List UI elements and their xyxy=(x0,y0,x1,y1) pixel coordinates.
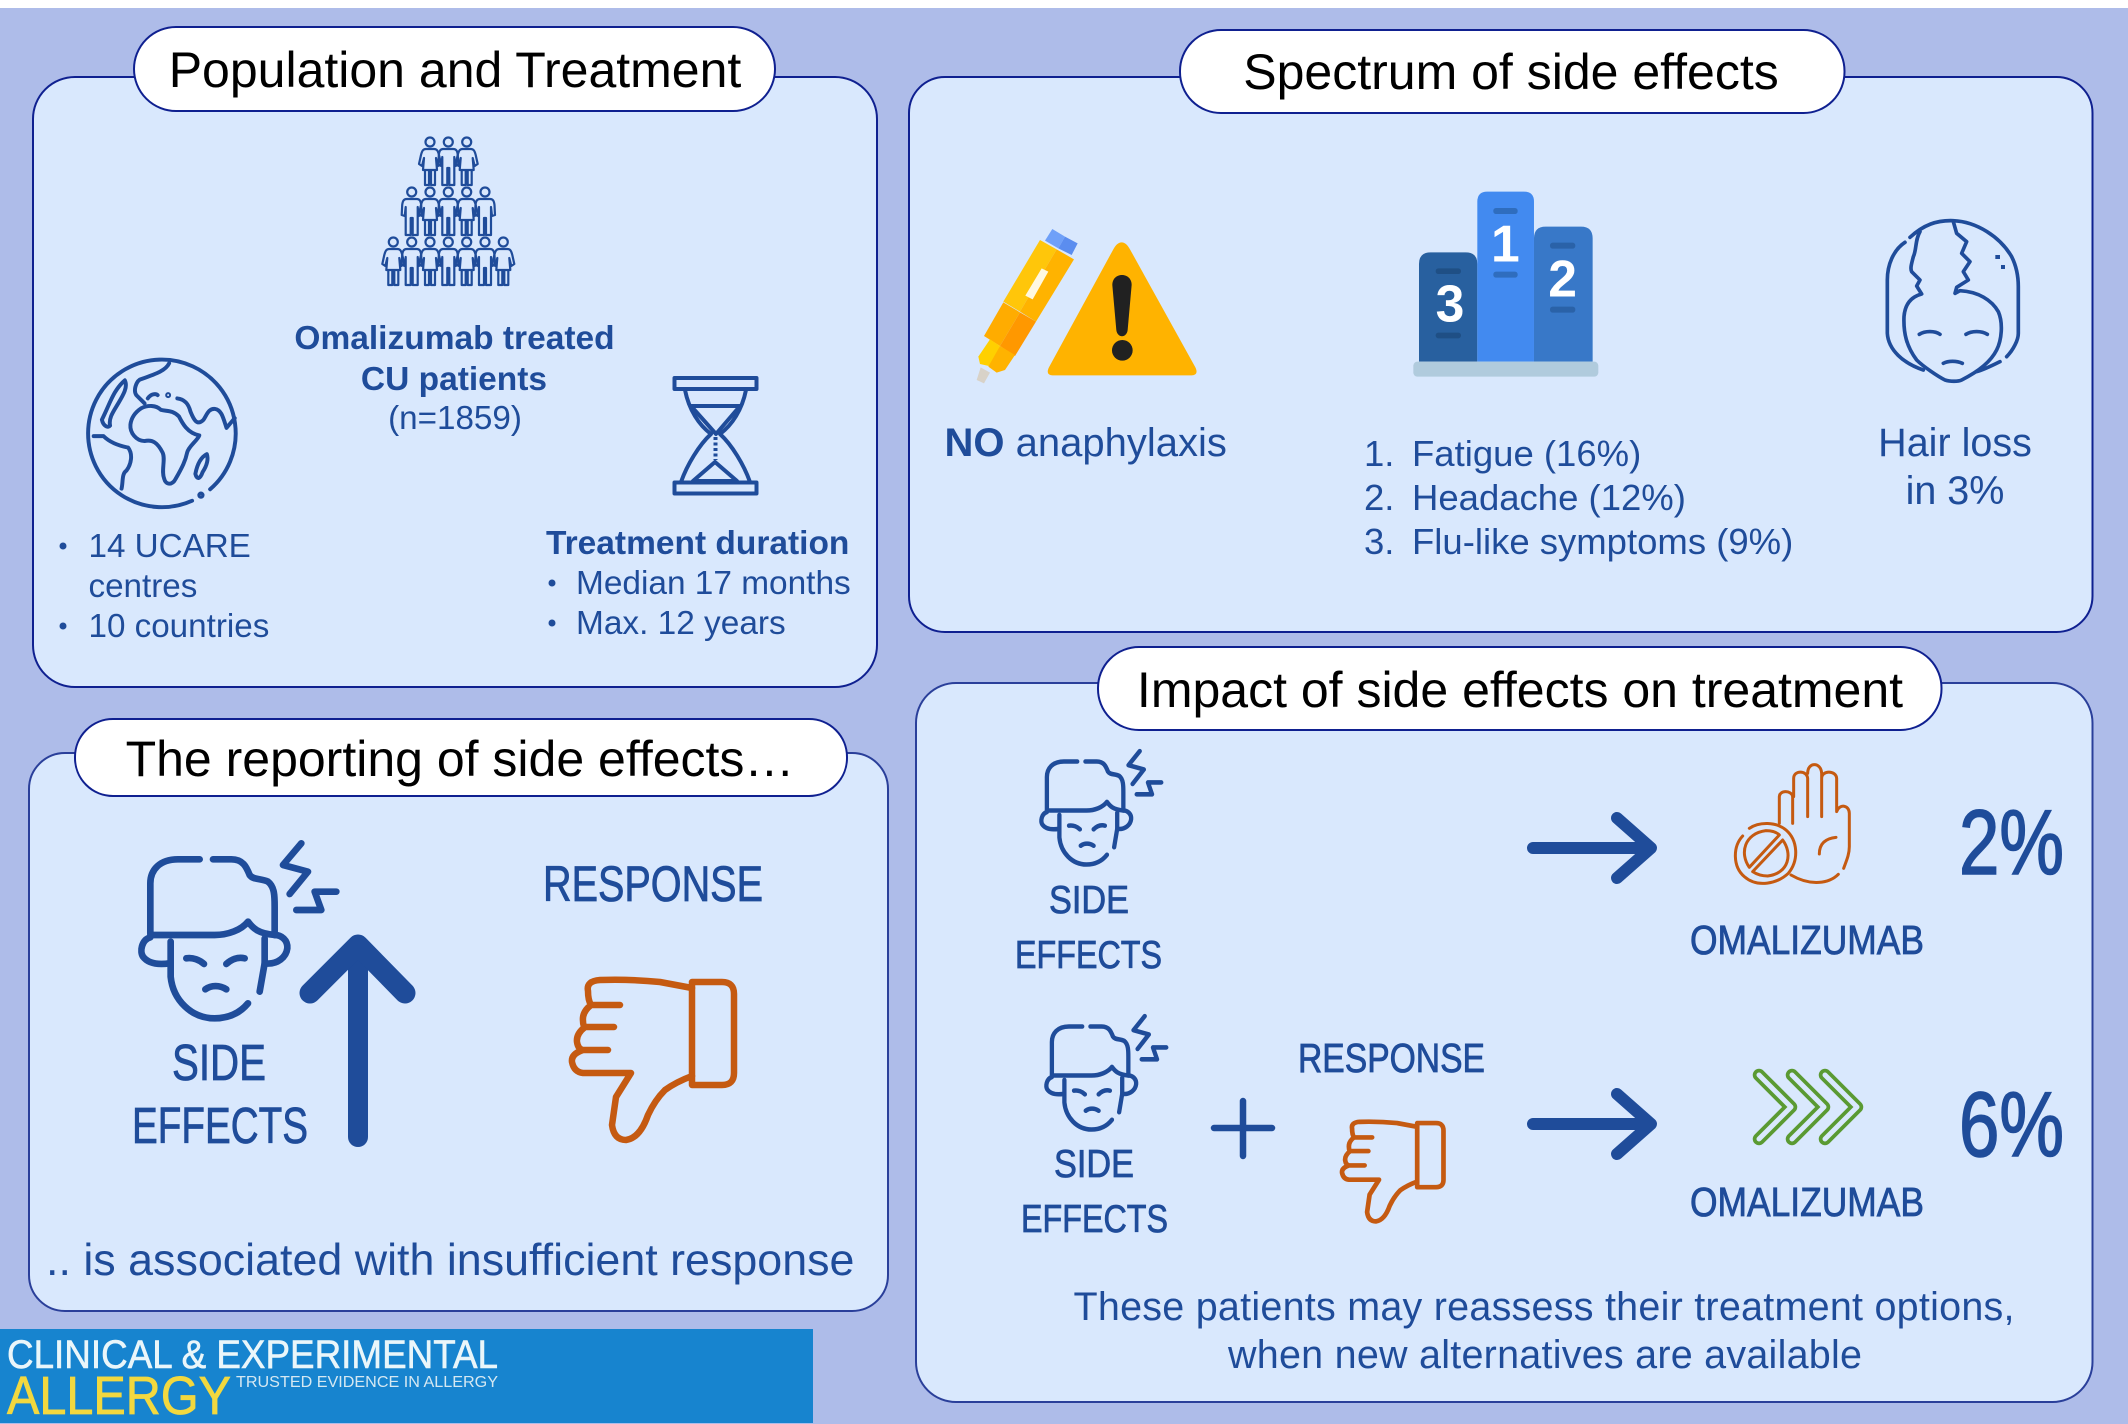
panel: Spectrum of side effects xyxy=(909,30,2092,632)
text: hair loss xyxy=(1878,421,2032,513)
text: conclusion: These patients may reassess their treatment options, xyxy=(1074,1285,2014,1329)
text: ranked side effects: 2. xyxy=(1364,477,1394,518)
text: centres and countries: 14 UCARE xyxy=(88,528,251,565)
text: side effects, row 2 xyxy=(1021,1143,1168,1241)
stat: 2%: 2% xyxy=(1959,792,2064,894)
text: hair loss: in 3% xyxy=(1906,469,2004,513)
icon: hourglass xyxy=(674,378,756,494)
icon: head with side effects, row 1 xyxy=(1041,751,1161,865)
icon: globe xyxy=(88,360,236,507)
panel: Population and Treatment xyxy=(33,27,877,687)
text: ranked side effects: 3. xyxy=(1364,521,1394,562)
text: side effects, row 1 xyxy=(1015,879,1162,977)
icon: plus xyxy=(1214,1101,1272,1156)
text: ranked side effects: 1. xyxy=(1364,433,1394,474)
icon: podium: 3 xyxy=(1436,275,1464,333)
text: omalizumab, row 2: OMALIZUMAB xyxy=(1690,1179,1924,1225)
text: side effects, row 2: SIDE xyxy=(1054,1143,1134,1186)
heading: Spectrum of side effects: Spectrum of side effects xyxy=(1243,44,1779,100)
text: side effects, row 2: EFFECTS xyxy=(1021,1198,1168,1241)
text: centres and countries xyxy=(60,528,269,645)
text: side effects, row 1: SIDE xyxy=(1049,879,1129,922)
text: treatment duration xyxy=(546,525,851,642)
text: treatment duration: Median 17 months xyxy=(576,565,851,602)
icon: head with side effects xyxy=(141,843,336,1018)
text: conclusion: when new alternatives are available xyxy=(1227,1333,1862,1377)
icon: injection pen and warning triangle xyxy=(977,229,1197,383)
text: side effects, row 1: EFFECTS xyxy=(1015,934,1162,977)
icon: podium: 1 xyxy=(1491,215,1520,273)
text: no anaphylaxis: NO anaphylaxis xyxy=(944,421,1227,465)
text: ranked side effects xyxy=(1364,433,1793,562)
arrow: row 1 xyxy=(1533,818,1651,878)
icon: thumb down xyxy=(572,980,734,1140)
text: centres and countries: centres xyxy=(88,568,197,605)
text: conclusion: .. is associated with insufficient response xyxy=(46,1235,854,1285)
heading: Spectrum of side effects xyxy=(1180,30,1844,113)
icon: hair loss xyxy=(1887,221,2018,381)
text: patient population: Omalizumab treated xyxy=(294,320,615,357)
text: ranked side effects: Fatigue (16%) xyxy=(1412,433,1641,474)
stat: 6%: 6% xyxy=(1959,1074,2064,1176)
logo: Clinical and Experimental Allergy: CLINICAL & EXPERIMENTAL xyxy=(7,1333,498,1377)
heading: The reporting of side effects: The reporting of side effects… xyxy=(126,731,794,787)
heading: The reporting of side effects xyxy=(75,719,847,796)
heading: Population and Treatment xyxy=(134,27,775,111)
icon: crowd of patients xyxy=(382,138,514,285)
text: side effects label xyxy=(132,1034,308,1154)
icon: podium: 2 xyxy=(1548,250,1577,308)
text: ranked side effects: Headache (12%) xyxy=(1412,477,1686,518)
text: patient population: (n=1859) xyxy=(388,400,522,437)
text: response label: RESPONSE xyxy=(543,856,763,912)
text: ranked side effects: Flu-like symptoms (9%) xyxy=(1412,521,1793,562)
text: side effects label: SIDE xyxy=(172,1034,266,1091)
text: conclusion xyxy=(1074,1285,2014,1377)
text: treatment duration: Treatment duration xyxy=(546,525,849,562)
logo: Clinical and Experimental Allergy xyxy=(0,1329,813,1424)
panel: Impact of side effects on treatment xyxy=(916,647,2092,1402)
text: patient population: CU patients xyxy=(361,361,547,398)
text: omalizumab, row 1: OMALIZUMAB xyxy=(1690,917,1924,963)
text: side effects label: EFFECTS xyxy=(132,1097,308,1154)
text: centres and countries: 10 countries xyxy=(88,608,269,645)
logo: Clinical and Experimental Allergy: TRUSTED EVIDENCE IN ALLERGY xyxy=(236,1374,498,1391)
icon: small thumb down xyxy=(1342,1122,1443,1221)
heading: Impact of side effects on treatment xyxy=(1098,647,1942,730)
text: patient population xyxy=(294,320,615,437)
text: hair loss: Hair loss xyxy=(1878,421,2032,465)
text: response, row 2: RESPONSE xyxy=(1298,1035,1485,1081)
icon: head with side effects, row 2 xyxy=(1046,1016,1166,1130)
heading: Impact of side effects on treatment: Impact of side effects on treatment xyxy=(1137,662,1903,718)
icon: green chevrons xyxy=(1759,1075,1857,1139)
arrow: row 2 xyxy=(1533,1094,1651,1154)
arrow: increased side effects xyxy=(310,945,405,1137)
heading: Population and Treatment: Population and Treatment xyxy=(169,42,741,98)
text: treatment duration: Max. 12 years xyxy=(576,605,786,642)
panel: The reporting of side effects xyxy=(29,719,888,1311)
icon: stop hand with pill xyxy=(1735,765,1849,883)
icon: podium xyxy=(1413,192,1598,377)
